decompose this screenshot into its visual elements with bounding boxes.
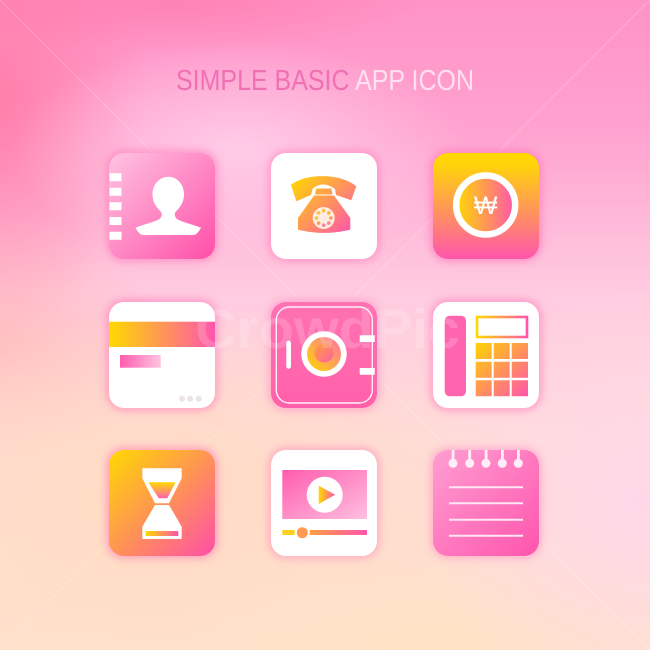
icon: desk phone bbox=[430, 299, 542, 411]
icon: bank card bbox=[106, 299, 218, 411]
icon: won coin: ₩ bbox=[474, 192, 498, 220]
icon: contacts book bbox=[106, 150, 218, 262]
icon: video player bbox=[268, 447, 380, 559]
rotary dial bbox=[313, 207, 335, 229]
icon: hourglass bbox=[106, 447, 218, 559]
icon: spiral notepad bbox=[430, 447, 542, 559]
title: SIMPLE BASIC APP ICON bbox=[176, 65, 474, 97]
icon: safe bbox=[268, 299, 380, 411]
watermark: CrowdPic bbox=[195, 297, 460, 360]
icon: rotary telephone bbox=[268, 150, 380, 262]
icon: won coin bbox=[430, 150, 542, 262]
